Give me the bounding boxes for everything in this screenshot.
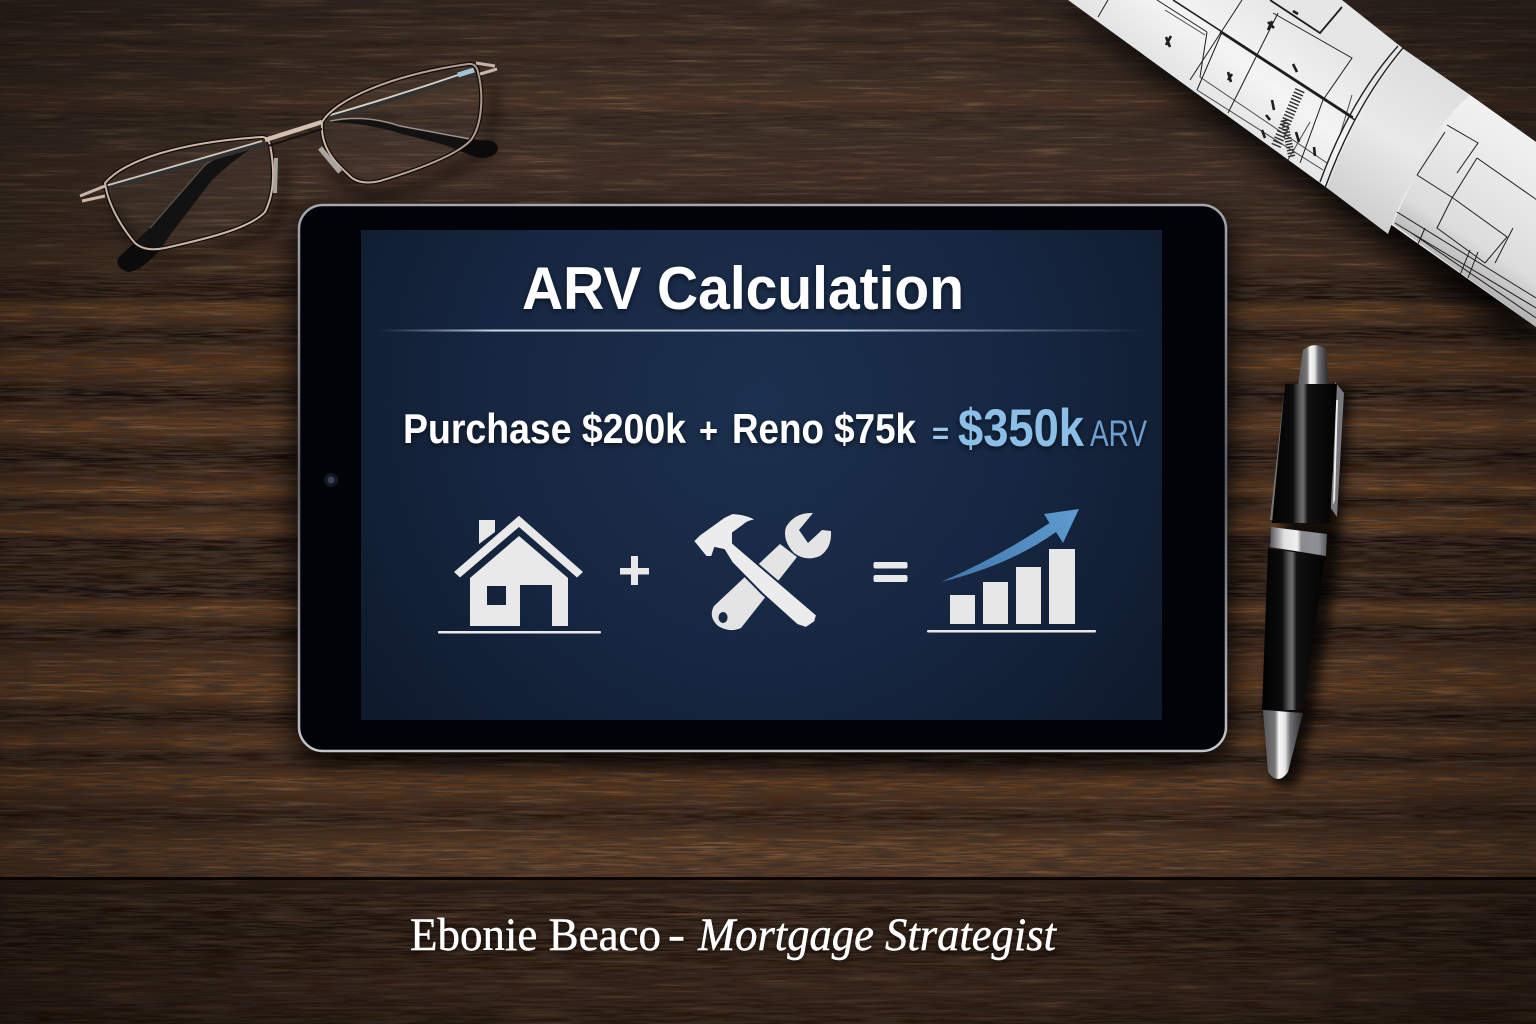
plus sign: +	[699, 410, 718, 451]
icon: growth chart	[927, 509, 1096, 632]
icon: hammer and wrench	[693, 513, 831, 630]
author name: Ebonie Beaco	[410, 909, 661, 961]
camera	[324, 473, 338, 487]
right lens frame	[322, 64, 481, 182]
pen clip	[1270, 382, 1344, 520]
growth arrow	[941, 509, 1079, 582]
left lens frame	[105, 137, 273, 249]
hammer	[693, 513, 817, 628]
rolled blueprint	[1040, 0, 1536, 355]
ARV result: $350k	[958, 399, 1084, 458]
separator: -	[668, 909, 685, 961]
far temple arm with black tip	[117, 70, 474, 272]
eyeglasses	[80, 63, 498, 272]
formula line	[403, 399, 1147, 458]
chart bars	[950, 549, 1075, 624]
bridge, hinges and nose pads	[80, 63, 497, 201]
title divider	[378, 330, 1146, 332]
renovation amount: Reno $75k	[732, 405, 917, 452]
near temple arm with black tip	[105, 118, 498, 188]
blueprint line drawing	[1098, 0, 1536, 318]
ARV label: ARV	[1090, 413, 1147, 454]
pen clicker	[1298, 345, 1328, 385]
pen ring	[1270, 527, 1327, 556]
pen lower barrel	[1262, 548, 1325, 710]
equals icon	[874, 562, 908, 582]
screen	[361, 230, 1162, 720]
wrench	[712, 513, 831, 630]
tablet	[294, 205, 1232, 764]
job title: Mortgage Strategist	[697, 909, 1057, 961]
tablet bezel	[299, 205, 1226, 751]
footer credit	[410, 909, 1057, 961]
title: ARV Calculation	[522, 255, 964, 322]
pen upper barrel	[1272, 384, 1337, 523]
icon: house	[438, 516, 601, 634]
pen	[1262, 345, 1350, 789]
pen tip	[1263, 710, 1303, 779]
equals sign: =	[932, 417, 949, 450]
chart baseline	[927, 630, 1096, 632]
blueprint paper sleeve	[1327, 50, 1470, 234]
plus icon	[620, 556, 649, 585]
purchase amount: Purchase $200k	[403, 405, 687, 452]
